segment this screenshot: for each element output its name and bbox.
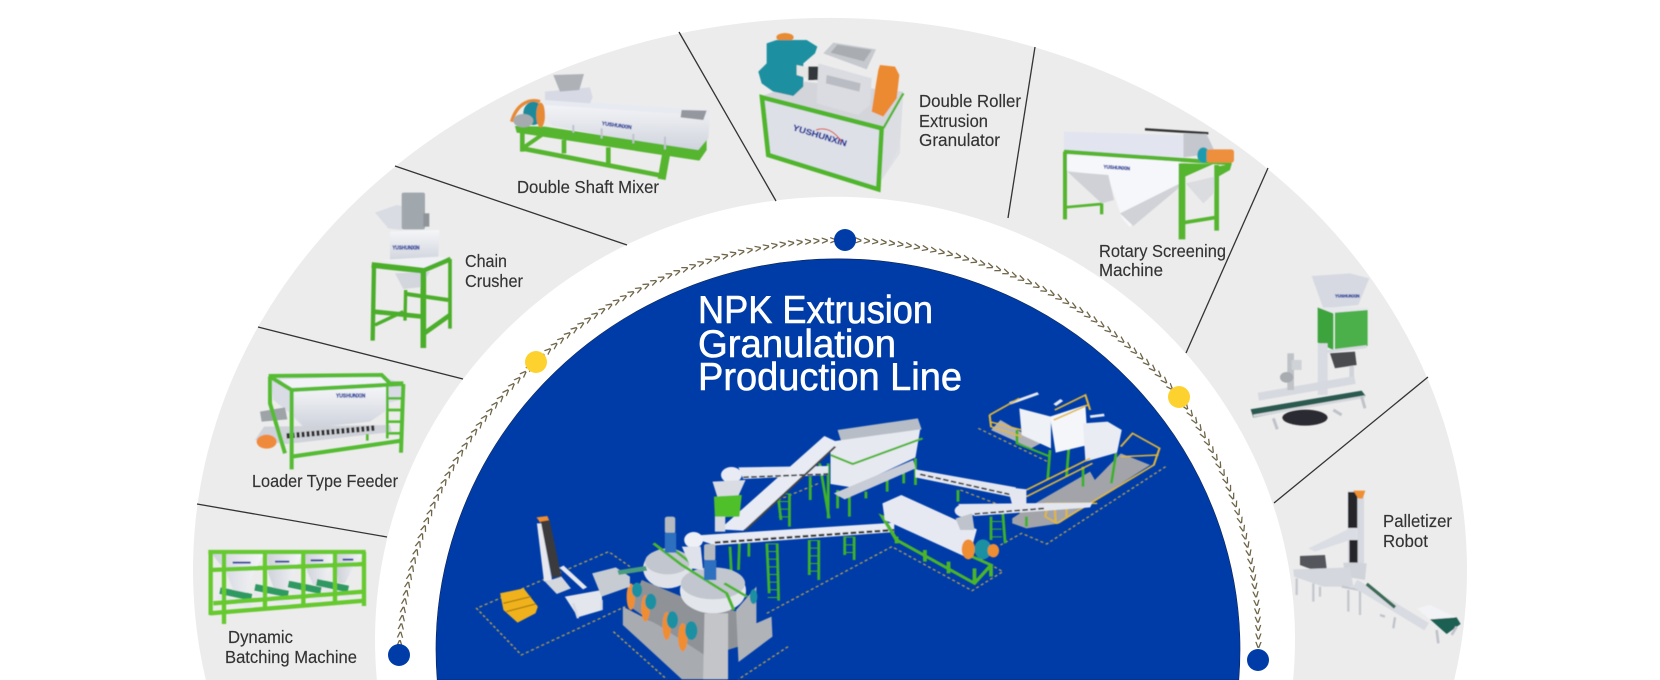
icon: rotary screening machine [1064, 129, 1234, 239]
icon: chain dot yellow left [525, 351, 547, 373]
ladders [730, 458, 1005, 601]
icon: chain dot blue right [1247, 649, 1269, 671]
panel: Chain Crusher [372, 193, 523, 348]
screen machine [838, 418, 922, 445]
text: Loader Type Feeder label: Loader Type Feeder [252, 471, 398, 491]
panel: Loader Type Feeder [252, 375, 403, 491]
text: Dynamic Batching Machine label: Batching Machine [225, 647, 357, 667]
conveyors [738, 466, 828, 479]
text: Dynamic Batching Machine label: Dynamic [228, 627, 293, 647]
title: Granulation [698, 323, 896, 366]
icon: chain dot blue left [388, 644, 410, 666]
text: Rotary Screening Machine label: Machine [1099, 260, 1163, 280]
text: Double Roller Extrusion Granulator label [919, 91, 1021, 150]
text: Rotary Screening Machine label: Rotary Screening [1099, 241, 1226, 261]
granulator pair [630, 580, 743, 657]
icon: double shaft mixer [512, 74, 711, 179]
panel: Double Roller Extrusion Granulator [758, 33, 1021, 189]
text: Double Roller Extrusion Granulator label: Granulator [919, 130, 1000, 150]
text: Palletizer Robot label: Robot [1383, 531, 1428, 551]
text: Chain Crusher label: Chain [465, 251, 507, 271]
text: Chain Crusher label: Crusher [465, 271, 523, 291]
icon: double roller granulator: YUSHUNXIN [792, 122, 848, 148]
chart: production line plant illustration [477, 393, 1166, 679]
icon: packing scale machine: YUSHUNXIN [1335, 294, 1360, 299]
panel: grey machine ring [193, 18, 1467, 680]
text: Chain Crusher label [465, 251, 523, 291]
panel: central blue circle [436, 259, 1240, 680]
panel: Dynamic Batching Machine [208, 552, 366, 667]
icon: chain crusher [372, 193, 451, 348]
icon: chain dot blue top [834, 229, 856, 251]
text: Dynamic Batching Machine label [225, 627, 357, 667]
arrow: chevron chain around the circle: >>>>>>>>>>>>>>>>>>>>>>>>>>>>>>>>>>>>>>>>>>>>>>>>>>>>>>>>>>>>>>>>>>>>>>>>>>>>>>>>>>>>>>>>>>>>>>>>>>>>>>>>>>>>>>>>>>>>>>>>>>>>>>>>>>>>>>>>>>>>>>>>>>>>>>>>>>>>>>>>>>>>>>>>>>>>>>>>>>>>>>>> [396, 237, 1262, 648]
text: Double Roller Extrusion Granulator label: Extrusion [919, 111, 988, 131]
silos floor [991, 420, 1041, 448]
icon: chain crusher: YUSHUNXIN [392, 245, 420, 251]
icon: loader feeder [255, 375, 403, 469]
title [698, 289, 962, 399]
panel: Double Shaft Mixer [512, 74, 711, 197]
mini palletizer [536, 516, 550, 524]
icon: loader feeder: YUSHUNXIN [336, 393, 365, 399]
icon: packing scale machine [1251, 273, 1369, 429]
icon: batching machine [208, 552, 366, 624]
text: Rotary Screening Machine label [1099, 241, 1226, 280]
pallet of bags [500, 588, 538, 623]
icon: rotary screening machine: YUSHUNXIN [1103, 164, 1131, 172]
panel: Rotary Screening Machine [1064, 129, 1234, 280]
text: Palletizer Robot label [1383, 511, 1452, 551]
icon: palletizer robot [1293, 491, 1461, 643]
icon: double roller granulator [758, 33, 903, 189]
text: Palletizer Robot label: Palletizer [1383, 511, 1452, 531]
title: Production Line [698, 356, 962, 399]
text: Double Roller Extrusion Granulator label: Double Roller [919, 91, 1021, 111]
icon: double shaft mixer: YUSHUNXIN [601, 121, 632, 131]
title: NPK Extrusion [698, 289, 933, 332]
panel: Palletizer Robot [1293, 491, 1461, 643]
text: Double Shaft Mixer label: Double Shaft Mixer [517, 177, 659, 197]
mixer machine [882, 517, 991, 583]
icon: chain dot yellow right [1168, 386, 1190, 408]
